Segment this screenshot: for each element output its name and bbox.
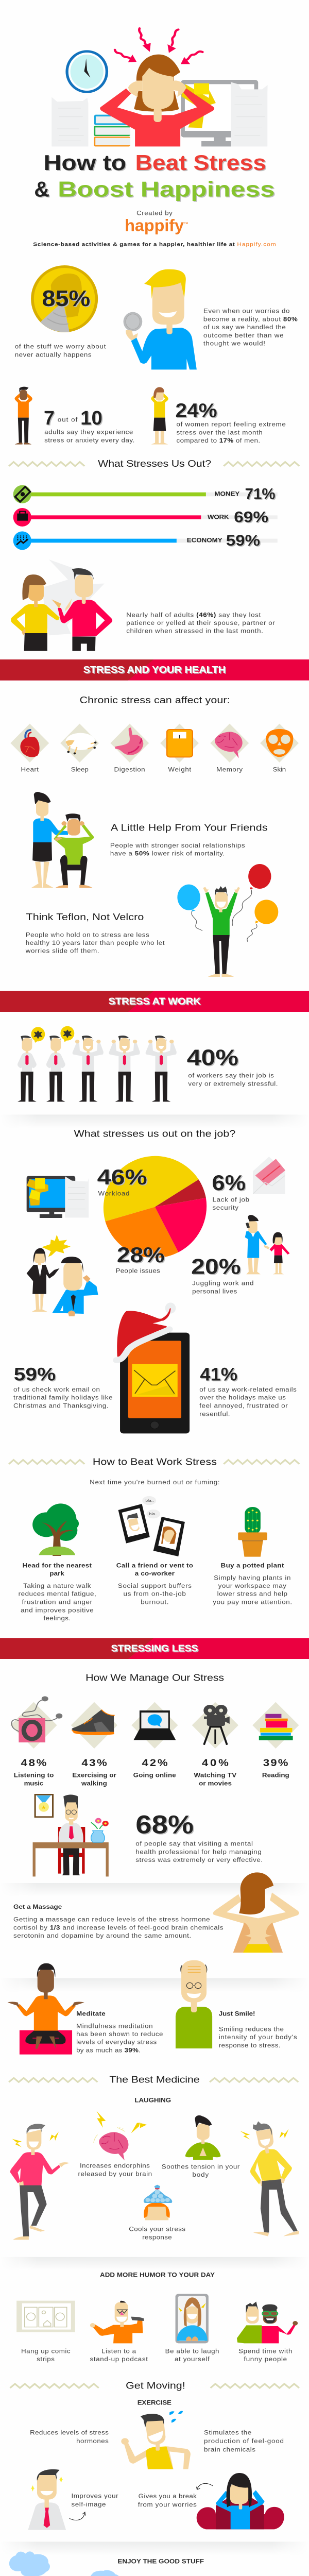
stat: 46% workload: 46%: [97, 1165, 147, 1189]
title: Beat Stress: [135, 150, 266, 175]
text: stimulates chemicals: Stimulates the: [204, 2429, 251, 2436]
stat: 28% people issues: People issues: [116, 1267, 160, 1274]
heading: what stresses us out: What Stresses Us Out?: [98, 459, 211, 469]
stat: 20% juggling: 20%: [191, 1254, 241, 1279]
heading: the best medicine: The Best Medicine: [109, 2075, 200, 2085]
text: humor labels: funny people: [244, 2356, 287, 2363]
illustration: massage: [213, 1872, 299, 1953]
text: organ labels: Sleep: [71, 766, 89, 773]
text: meditate: [76, 2010, 163, 2054]
panel: holiday email: [9, 1302, 299, 1557]
title: Boost Happiness: [58, 177, 275, 201]
banner: stress and your health: [0, 659, 309, 681]
text: potted plant tip: Buy a potted plant: [221, 1562, 284, 1569]
icon: stack of books: [94, 115, 131, 146]
illustration: five office workers: [18, 1026, 177, 1101]
text: endorphins: released by your brain: [78, 2171, 152, 2177]
text: nearest park tip: reduces mental fatigue,: [19, 1590, 96, 1597]
text: 80% handled outcome: outcome better than we: [203, 332, 284, 339]
icon: laptop: [131, 1702, 178, 1749]
illustration: therapist at desk: [33, 1794, 109, 1876]
stat: 46% workload: Workload: [98, 1190, 129, 1197]
text: stimulates chemicals: production of feel-good: [204, 2438, 284, 2445]
stat: 7 out of 10: adults say they experience: [44, 429, 133, 435]
stat: 41% annoyed: feel annoyed, frustrated or: [199, 1402, 288, 1409]
text: manage stress labels: [14, 1772, 289, 1787]
illustration: confident man: [28, 2469, 66, 2530]
text: think teflon: worries slide off them.: [25, 947, 99, 954]
text: nearest park tip: Taking a nature walk: [23, 1583, 91, 1589]
text: tagline: Science-based activities & games for a happier, healthier life at: [33, 242, 235, 247]
text: manage stress percentages: [21, 1757, 288, 1769]
banner: stress and your health: STRESS AND YOUR HEALTH: [83, 665, 226, 675]
text: manage stress labels: Reading: [262, 1772, 289, 1778]
panel: stress at work: [0, 1026, 309, 1316]
text: improves self-image: Improves your: [72, 2493, 118, 2499]
text: break from worries: Gives you a break: [139, 2493, 197, 2500]
text: potted plant tip: you pay more attention.: [213, 1599, 292, 1605]
stat: 20% juggling: personal lives: [192, 1288, 237, 1295]
illustration: arguing couple: [11, 560, 112, 651]
stat: 24% of women: 24%: [176, 399, 217, 421]
banner: stressing less: STRESSING LESS: [111, 1643, 198, 1654]
illustration: funny friends: [237, 2301, 298, 2343]
panel: professional help and relaxation: [0, 1794, 309, 2055]
icon: comic strips: [16, 2301, 75, 2332]
banner: stressing less: [0, 1638, 309, 1659]
text: call a friend tip: burnout.: [141, 1599, 169, 1605]
stat: 7 out of 10: 10: [80, 407, 102, 429]
text: manage stress labels: Going online: [133, 1772, 176, 1778]
chart: economy bar: ECONOMY: [187, 537, 222, 544]
text: break from worries: from your worries: [138, 2501, 197, 2508]
panel: tips and stressing less: [0, 1562, 309, 1787]
stat: 6% lack of job security: [212, 1171, 249, 1211]
stat: 40% of workers: [187, 1045, 278, 1087]
banner: stress at work: [0, 991, 309, 1012]
title: [34, 150, 275, 201]
stat: 41% annoyed: 41%: [200, 1364, 237, 1384]
icon: computer monitor and sticky notes: [181, 80, 258, 146]
text: organ labels: Skin: [273, 766, 286, 773]
icon: face mask: [260, 724, 299, 762]
stat: 24% of women: compared to 17% of men.: [176, 437, 260, 444]
illustration: relaxed woman: [185, 2115, 221, 2160]
text: call a friend tip: a co-worker: [135, 1570, 175, 1577]
stat: 59% check email: of us check work email on: [13, 1386, 100, 1393]
icon: paper stack left: [52, 97, 88, 146]
stat: 68% therapy effective: 68%: [135, 1810, 194, 1839]
text: manage stress percentages: 48%: [21, 1757, 46, 1769]
text: humor labels: stand-up podcast: [90, 2356, 148, 2363]
chart: job stress pie: [104, 1156, 207, 1258]
text: manage stress percentages: 39%: [263, 1757, 288, 1769]
text: nearest park tip: feelings.: [44, 1615, 71, 1622]
icon: monitor with notes and papers: [27, 1176, 89, 1218]
stat: 7 out of 10: stress or anxiety every day.: [44, 437, 134, 444]
icon: paper stack right: [231, 82, 268, 146]
icon: film camera: [192, 1702, 238, 1749]
text: potted plant tip: your workspace may: [218, 1583, 287, 1589]
icon: phones with bla bubbles: bla..: [145, 1498, 153, 1503]
illustration: mother on phone with child: [245, 1215, 289, 1274]
text: improves self-image: [72, 2493, 118, 2508]
icon: 85% coin: 85%: [42, 286, 90, 311]
text: 80% handled outcome: [203, 308, 298, 347]
illustration: therapist at desk: ★: [41, 1805, 46, 1810]
text: manage stress percentages: 40%: [202, 1757, 229, 1769]
illustration: ice pack on head: [144, 2185, 172, 2220]
text: break from worries: [138, 2493, 197, 2508]
stat: 40% of workers: 40%: [187, 1045, 238, 1070]
text: get a massage: Get a Massage: [13, 1904, 62, 1910]
text: exercise: EXERCISE: [138, 2399, 171, 2406]
chart: work bar: WORK: [208, 514, 229, 520]
text: potted plant tip: [213, 1562, 292, 1605]
text: soothes tension: Soothes tension in your: [162, 2163, 239, 2170]
text: laughing: LAUGHING: [134, 2097, 171, 2104]
stat: 7 out of 10: out of: [58, 416, 78, 423]
text: stimulates chemicals: [204, 2429, 284, 2453]
text: friends heading and copy: have a 50% lower risk of mortality.: [110, 850, 225, 857]
heading: chronic stress: Chronic stress can affect your:: [80, 695, 230, 706]
stat: 59% check email: [13, 1364, 113, 1409]
text: manage stress percentages: 42%: [142, 1757, 168, 1769]
text: just smile: Just Smile!: [219, 2010, 255, 2017]
illustration: woman relaxing in armchair: [197, 2473, 284, 2529]
text: nearly half of adults: children when stressed in the last month.: [126, 628, 263, 634]
icon: stack of books: [252, 1702, 299, 1749]
text: nearly half of adults: patience or yelled at their spouse, partner or: [126, 620, 275, 626]
text: potted plant tip: lower stress and help: [217, 1590, 287, 1597]
text: nearest park tip: and improves positive: [21, 1607, 94, 1614]
illustration: stressed woman: [100, 55, 214, 146]
text: 80% handled outcome: become a reality, about 80%: [203, 316, 298, 323]
text: just smile: intensity of your body's: [219, 2034, 297, 2041]
text: get a massage: serotonin and dopamine by around the same amount.: [13, 1933, 191, 1939]
illustration: brain with sparks: [94, 2111, 147, 2160]
text: nearest park tip: [19, 1562, 96, 1622]
text: just smile: [219, 2010, 297, 2049]
text: think teflon: [25, 912, 165, 954]
text: think teflon: People who hold on to stress are less: [26, 931, 149, 938]
illustration: happy man with balloons: [177, 864, 278, 977]
arrow: to self-image: [70, 2512, 85, 2520]
text: add more humor: ADD MORE HUMOR TO YOUR DAY: [100, 2272, 215, 2278]
icon: stomach: [110, 724, 149, 762]
logo: happify: happify: [125, 216, 184, 235]
text: manage stress labels: walking: [81, 1780, 107, 1787]
icon: heart: [10, 724, 49, 762]
illustration: friend comforting seated man: [31, 792, 94, 888]
text: organ labels: Heart: [21, 766, 39, 773]
text: cools stress: Cools your stress: [129, 2226, 185, 2232]
stat: 59% check email: traditional family holidays like: [13, 1394, 113, 1401]
icon: phones with bla bubbles: bla..: [149, 1512, 158, 1516]
text: 85% caption: of the stuff we worry about: [15, 343, 106, 350]
illustration: man listening to podcast: [90, 2301, 144, 2343]
stat: 41% annoyed: over the holidays make us: [199, 1394, 286, 1401]
heading: what stresses us on the job: What stresses us out on the job?: [74, 1129, 235, 1139]
text: 85% caption: [15, 343, 106, 358]
stat: 28% people issues: 28%: [117, 1243, 165, 1267]
panel: the best medicine: [0, 2075, 309, 2343]
icon: 85% coin: [31, 265, 98, 332]
text: organ labels: Digestion: [114, 766, 145, 773]
text: meditate: has been shown to reduce: [76, 2031, 163, 2038]
icon: sneaker: [71, 1702, 117, 1749]
text: friends heading and copy: [110, 823, 268, 857]
title: How to: [44, 150, 126, 175]
chart: economy bar: [13, 531, 278, 550]
illustration: woman with hands on head: [151, 387, 168, 445]
text: 80% handled outcome: of us say we handled the: [203, 324, 286, 331]
heading: how to beat work stress: [9, 1457, 299, 1467]
logo: happify: TM: [184, 222, 188, 225]
text: manage stress labels: Exercising or: [72, 1772, 116, 1778]
panel: friends and teflon: [0, 792, 309, 1012]
stat: 68% therapy effective: stress was extremely or very effective.: [135, 1857, 263, 1863]
text: reduces stress hormones: Reduces levels of stress: [30, 2429, 109, 2436]
text: get a massage: [13, 1904, 224, 1939]
text: humor labels: strips: [37, 2356, 55, 2363]
heading: get moving: Get Moving!: [126, 2381, 185, 2391]
stat: 40% of workers: very or extremely stressful.: [188, 1080, 278, 1087]
text: 80% handled outcome: thought we would!: [203, 340, 265, 347]
text: organ labels: [21, 766, 286, 773]
text: endorphins: Increases endorphins: [80, 2162, 150, 2169]
stat: 20% juggling: Juggling work and: [192, 1280, 253, 1286]
text: nearest park tip: frustration and anger: [22, 1599, 92, 1605]
text: friends heading and copy: A Little Help From Your Friends: [111, 823, 268, 833]
illustration: man with hands on head: [14, 387, 32, 445]
icon: cloud right: [90, 2570, 121, 2576]
stat: 41% annoyed: of us say work-related emails: [199, 1386, 297, 1393]
text: cools stress: [129, 2226, 185, 2241]
chart: economy bar: 59%: [226, 532, 260, 549]
text: potted plant tip: Simply having plants in: [214, 1574, 290, 1581]
icon: tree: [32, 1503, 79, 1556]
text: humor labels: Hang up comic: [21, 2348, 71, 2354]
text: soothes tension: [162, 2163, 239, 2178]
text: manage stress percentages: 43%: [81, 1757, 107, 1769]
stat: 6% lack of job security: Lack of job: [212, 1196, 249, 1203]
text: manage stress labels: or movies: [199, 1780, 232, 1787]
heading: how to beat work stress: How to Beat Work Stress: [93, 1457, 217, 1467]
text: just smile: Smiling reduces the: [219, 2026, 284, 2032]
illustration: laughing man right: [240, 2121, 299, 2236]
text: organ labels: Memory: [216, 766, 243, 773]
text: enjoy the good stuff: ENJOY THE GOOD STUFF: [117, 2558, 204, 2565]
text: next time: Next time you're burned out or fuming:: [90, 1479, 220, 1486]
panel: worry statistics: [9, 265, 299, 550]
icon: sheep: [60, 724, 99, 762]
illustration: laughing man left: [10, 2124, 70, 2240]
illustration: arguing coworkers: [27, 1235, 98, 1316]
panel: header: [33, 28, 276, 247]
stat: 20% juggling: [191, 1254, 253, 1295]
text: think teflon: healthy 10 years later than people who let: [26, 940, 165, 946]
text: humor labels: at yourself: [175, 2356, 210, 2363]
stat: 68% therapy effective: health professional for help managing: [135, 1849, 262, 1855]
text: call a friend tip: Social support buffers: [118, 1583, 192, 1589]
illustration: man holding coin: [124, 269, 197, 369]
heading: what stresses us out: [9, 459, 299, 469]
icon: red stress arrows: [115, 28, 202, 64]
text: nearly half of adults: Nearly half of adults (46%) say they lost: [126, 612, 261, 618]
text: endorphins: [78, 2162, 152, 2177]
icon: scale: [160, 724, 199, 762]
illustration: phone with santa hat: [116, 1302, 190, 1433]
text: just smile: response to stress.: [219, 2042, 281, 2049]
text: meditate: by as much as 39%.: [76, 2047, 141, 2054]
icon: music player: [10, 1696, 62, 1749]
icon: cloud left: [9, 2551, 50, 2576]
icon: envelope with pink slip: [253, 1157, 285, 1194]
text: 85% caption: never actually happens: [15, 351, 92, 358]
text: think teflon: Think Teflon, Not Velcro: [26, 912, 144, 923]
icon: cactus: [238, 1507, 267, 1557]
text: soothes tension: body: [192, 2172, 209, 2178]
text: get a massage: cortisol by 1/3 and increase levels of feel-good brain chemicals: [13, 1924, 224, 1931]
text: improves self-image: self-image: [72, 2501, 106, 2508]
heading: how we manage our stress: How We Manage Our Stress: [85, 1673, 224, 1683]
text: 80% handled outcome: Even when our worries do: [203, 308, 290, 314]
text: manage stress labels: Watching TV: [194, 1772, 237, 1778]
arrow: to break: [197, 2483, 213, 2489]
stat: 24% of women: [176, 399, 286, 444]
text: nearest park tip: Head for the nearest: [23, 1562, 92, 1569]
stat: 59% check email: 59%: [14, 1364, 56, 1384]
text: call a friend tip: [116, 1562, 193, 1605]
stat: 41% annoyed: [199, 1364, 297, 1417]
stat: 41% annoyed: resentful.: [199, 1411, 230, 1417]
text: cools stress: response: [142, 2234, 172, 2241]
text: humor labels: [21, 2348, 292, 2363]
chart: work bar: [13, 508, 278, 527]
text: meditate: levels of everyday stress: [76, 2039, 157, 2045]
text: reduces stress hormones: hormones: [76, 2438, 109, 2445]
illustration: meditating man: [8, 1963, 84, 2055]
text: nearest park tip: park: [49, 1570, 64, 1577]
illustration: exercising man: [121, 2411, 191, 2469]
title: &: [34, 177, 49, 201]
stat: 68% therapy effective: [135, 1810, 263, 1863]
text: manage stress labels: music: [24, 1780, 43, 1787]
text: humor labels: Listen to a: [101, 2348, 136, 2354]
heading: the best medicine: [9, 2075, 298, 2085]
illustration: smiling bald man: [176, 1960, 212, 2048]
text: call a friend tip: Call a friend or vent to: [116, 1562, 193, 1569]
banner: stress at work: STRESS AT WORK: [108, 996, 201, 1007]
icon: brain: [210, 724, 249, 762]
chart: money bar: MONEY: [214, 490, 240, 497]
text: meditate: Mindfulness meditation: [76, 2023, 153, 2029]
panel: stress and your health: [0, 560, 309, 773]
text: stimulates chemicals: brain chemicals: [204, 2446, 255, 2453]
text: created by: Created by: [136, 210, 173, 216]
panel: humor and get moving: [0, 2348, 309, 2576]
stat: 68% therapy effective: of people say that visiting a mental: [135, 1840, 253, 1847]
chart: money bar: [13, 485, 278, 503]
stat: 7 out of 10: 7: [44, 407, 55, 429]
text: meditate: Meditate: [76, 2010, 106, 2017]
icon: phones with bla bubbles: [118, 1496, 185, 1556]
text: nearly half of adults: [126, 612, 275, 634]
chart: money bar: 71%: [245, 485, 276, 502]
text: get a massage: Getting a massage can reduce levels of the stress hormone: [13, 1916, 210, 1923]
chart: work bar: 69%: [234, 508, 268, 526]
text: organ labels: Weight: [168, 766, 192, 773]
stat: 7 out of 10: [44, 407, 134, 444]
text: friends heading and copy: People with stronger social relationships: [110, 842, 245, 849]
text: humor labels: Be able to laugh: [165, 2348, 219, 2354]
heading: get moving: [10, 2381, 299, 2391]
panel: savoring and giving: [91, 2570, 118, 2576]
illustration: woman in mirror: [176, 2294, 209, 2343]
stat: 6% lack of job security: security: [212, 1205, 239, 1211]
icon: wall clock: [67, 52, 107, 92]
text: tagline: Happify.com: [237, 242, 276, 247]
stat: 40% of workers: of workers say their job is: [188, 1072, 274, 1079]
text: manage stress labels: Listening to: [14, 1772, 54, 1778]
stat: 24% of women: of women report feeling extreme: [176, 421, 286, 428]
text: reduces stress hormones: [30, 2429, 109, 2445]
stat: 24% of women: stress over the last month: [176, 429, 263, 436]
stat: 6% lack of job security: 6%: [212, 1171, 246, 1195]
text: call a friend tip: us from on-the-job: [124, 1590, 186, 1597]
stat: 59% check email: Christmas and Thanksgiving.: [13, 1402, 108, 1409]
text: humor labels: Spend time with: [238, 2348, 292, 2354]
